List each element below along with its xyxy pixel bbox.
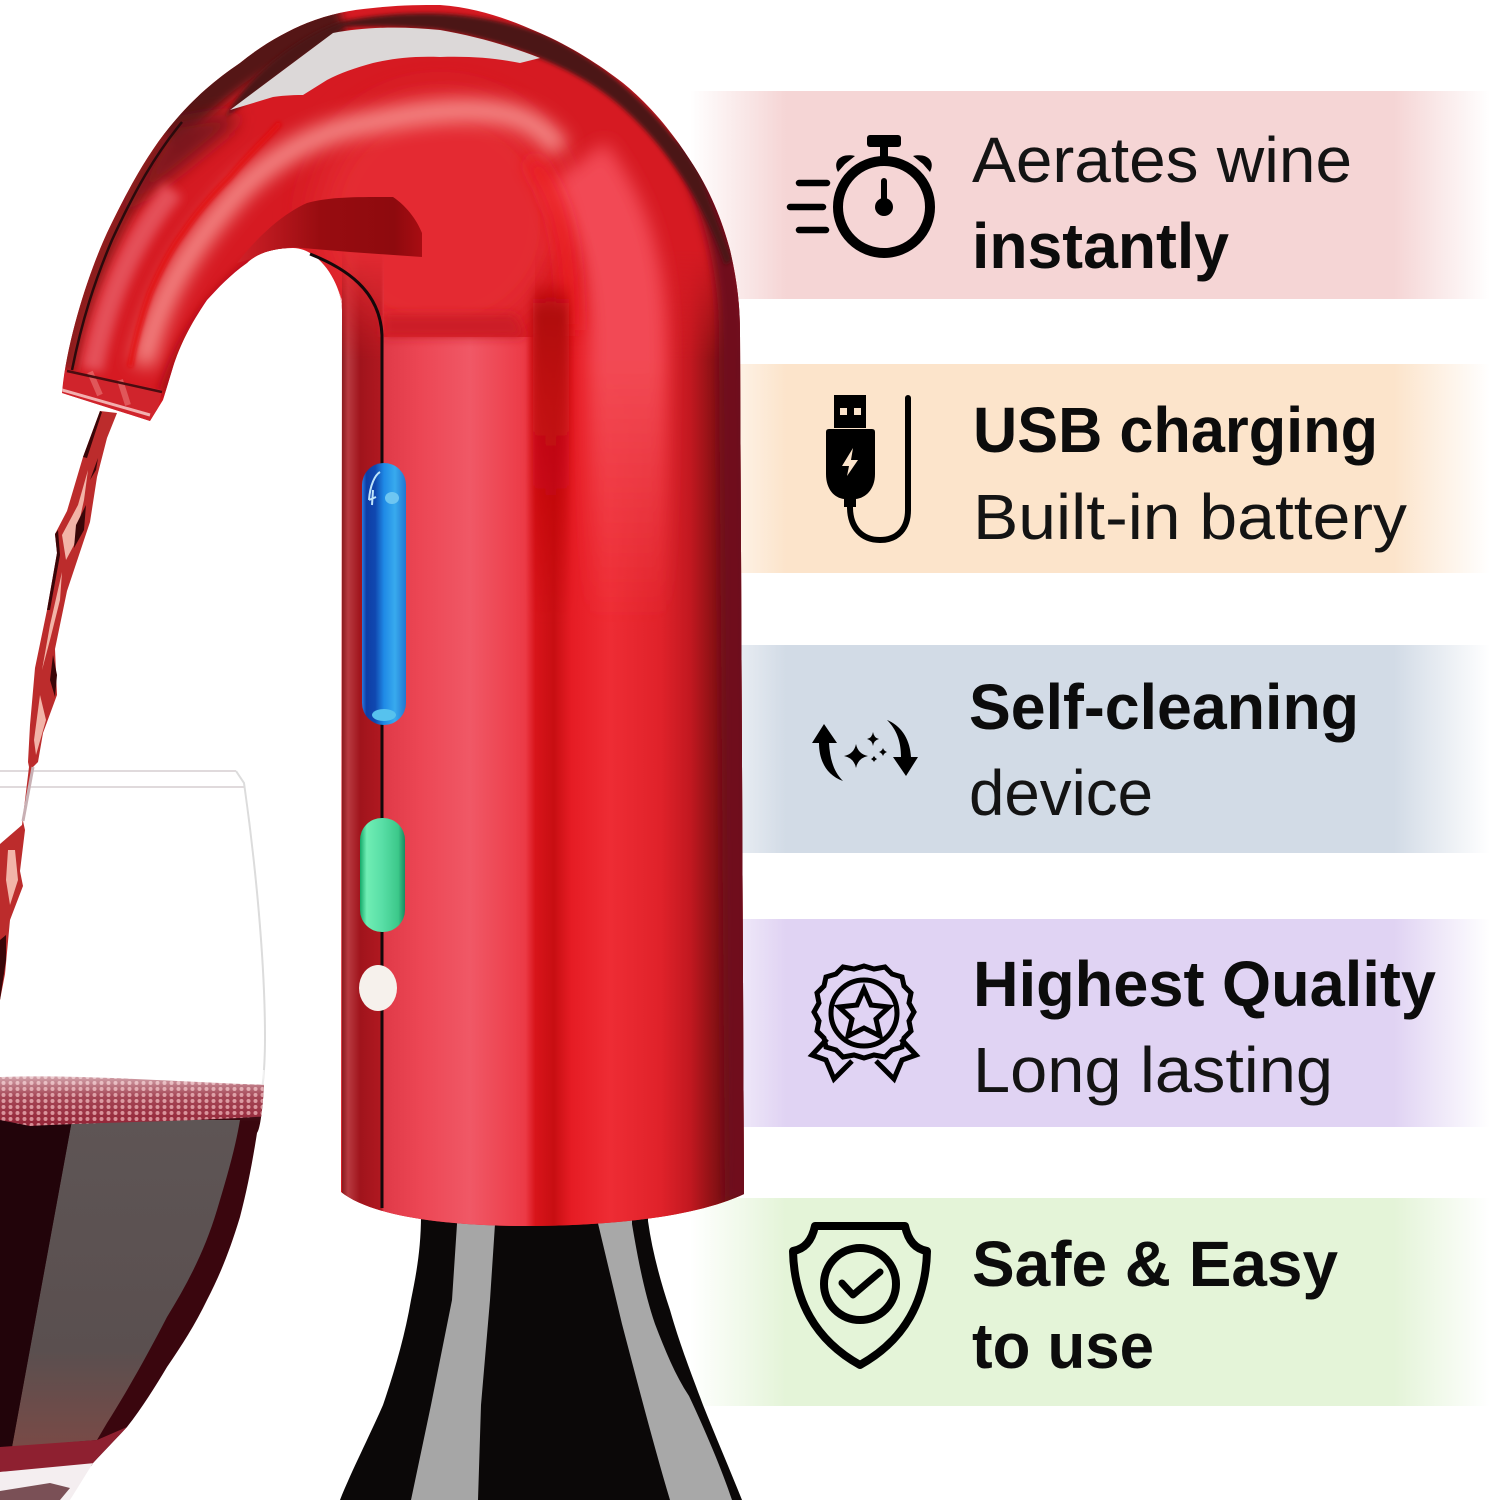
panel: self-cleaning band xyxy=(690,645,1490,853)
button: white xyxy=(359,965,397,1011)
text: highest quality long lasting xyxy=(973,948,1436,1106)
dark corner band xyxy=(533,280,569,620)
icon: safety shield xyxy=(793,1226,927,1365)
right shoulder pink xyxy=(575,165,628,620)
button: green light xyxy=(360,818,405,932)
bottle xyxy=(340,1215,742,1500)
text: self-cleaning device: device xyxy=(969,757,1153,829)
panel: usb charging band xyxy=(690,364,1490,573)
head sphere xyxy=(303,122,554,317)
text: usb charging built-in battery: Built-in battery xyxy=(973,481,1407,553)
dark wine left xyxy=(0,1120,72,1447)
pink column left section xyxy=(384,337,535,1237)
spout left band xyxy=(92,190,173,370)
device: aerator body xyxy=(40,0,760,1240)
under-arch pale xyxy=(338,288,342,307)
silver highlight xyxy=(230,28,540,110)
icon: usb cable xyxy=(826,395,908,540)
section left of seam xyxy=(342,250,384,1240)
icon: self-cleaning sparkles xyxy=(812,720,918,781)
stream dark patches xyxy=(0,411,102,1000)
spout upper outer maroon xyxy=(160,14,340,135)
top maroon band xyxy=(225,13,732,265)
glass base xyxy=(0,1463,95,1500)
icon: stopwatch xyxy=(790,135,932,253)
wine glass xyxy=(0,771,280,1500)
wine stream xyxy=(0,411,117,1000)
wine body xyxy=(0,1086,280,1466)
text: aerates wine instantly xyxy=(972,124,1352,282)
text: safe and easy to use: to use xyxy=(972,1310,1154,1382)
panel: aerates wine band xyxy=(690,91,1490,299)
text: usb charging built-in battery xyxy=(973,394,1407,553)
spout upper maroon fade xyxy=(120,112,235,215)
spout edge line xyxy=(72,122,182,370)
right edge dark band xyxy=(680,140,738,1200)
wine base red xyxy=(0,1427,127,1472)
text: highest quality long lasting: Long lasting xyxy=(973,1034,1333,1106)
seam line xyxy=(310,254,382,1208)
spout lower outer dark xyxy=(66,135,165,370)
right column xyxy=(535,250,750,1240)
panel: safe and easy band xyxy=(690,1198,1490,1406)
text: aerates wine instantly: Aerates wine xyxy=(972,124,1352,196)
text: safe and easy to use xyxy=(972,1228,1338,1382)
tip ring xyxy=(62,370,162,421)
red streak xyxy=(130,123,280,367)
text: self-cleaning device xyxy=(969,671,1359,829)
bright red arc xyxy=(530,160,570,330)
spout inner band xyxy=(165,240,290,395)
text: safe and easy to use: Safe & Easy xyxy=(972,1228,1338,1300)
foam bubbles xyxy=(0,1076,270,1126)
stream light core xyxy=(6,470,88,905)
text: self-cleaning device: Self-cleaning xyxy=(969,671,1359,743)
icon: quality medal xyxy=(812,966,916,1079)
bottle right reflection xyxy=(596,1215,732,1500)
text: highest quality long lasting: Highest Quality xyxy=(973,948,1436,1020)
column top shading xyxy=(383,315,525,337)
text: usb charging built-in battery: USB charging xyxy=(973,394,1378,466)
text: aerates wine instantly: instantly xyxy=(972,210,1229,282)
bottle left reflection xyxy=(411,1215,495,1500)
arch shadow xyxy=(237,197,422,263)
panel: highest quality band xyxy=(690,919,1490,1127)
button: blue light xyxy=(362,463,406,725)
spout pale highlight arc xyxy=(143,110,560,365)
grey reflection in wine xyxy=(12,1120,240,1447)
